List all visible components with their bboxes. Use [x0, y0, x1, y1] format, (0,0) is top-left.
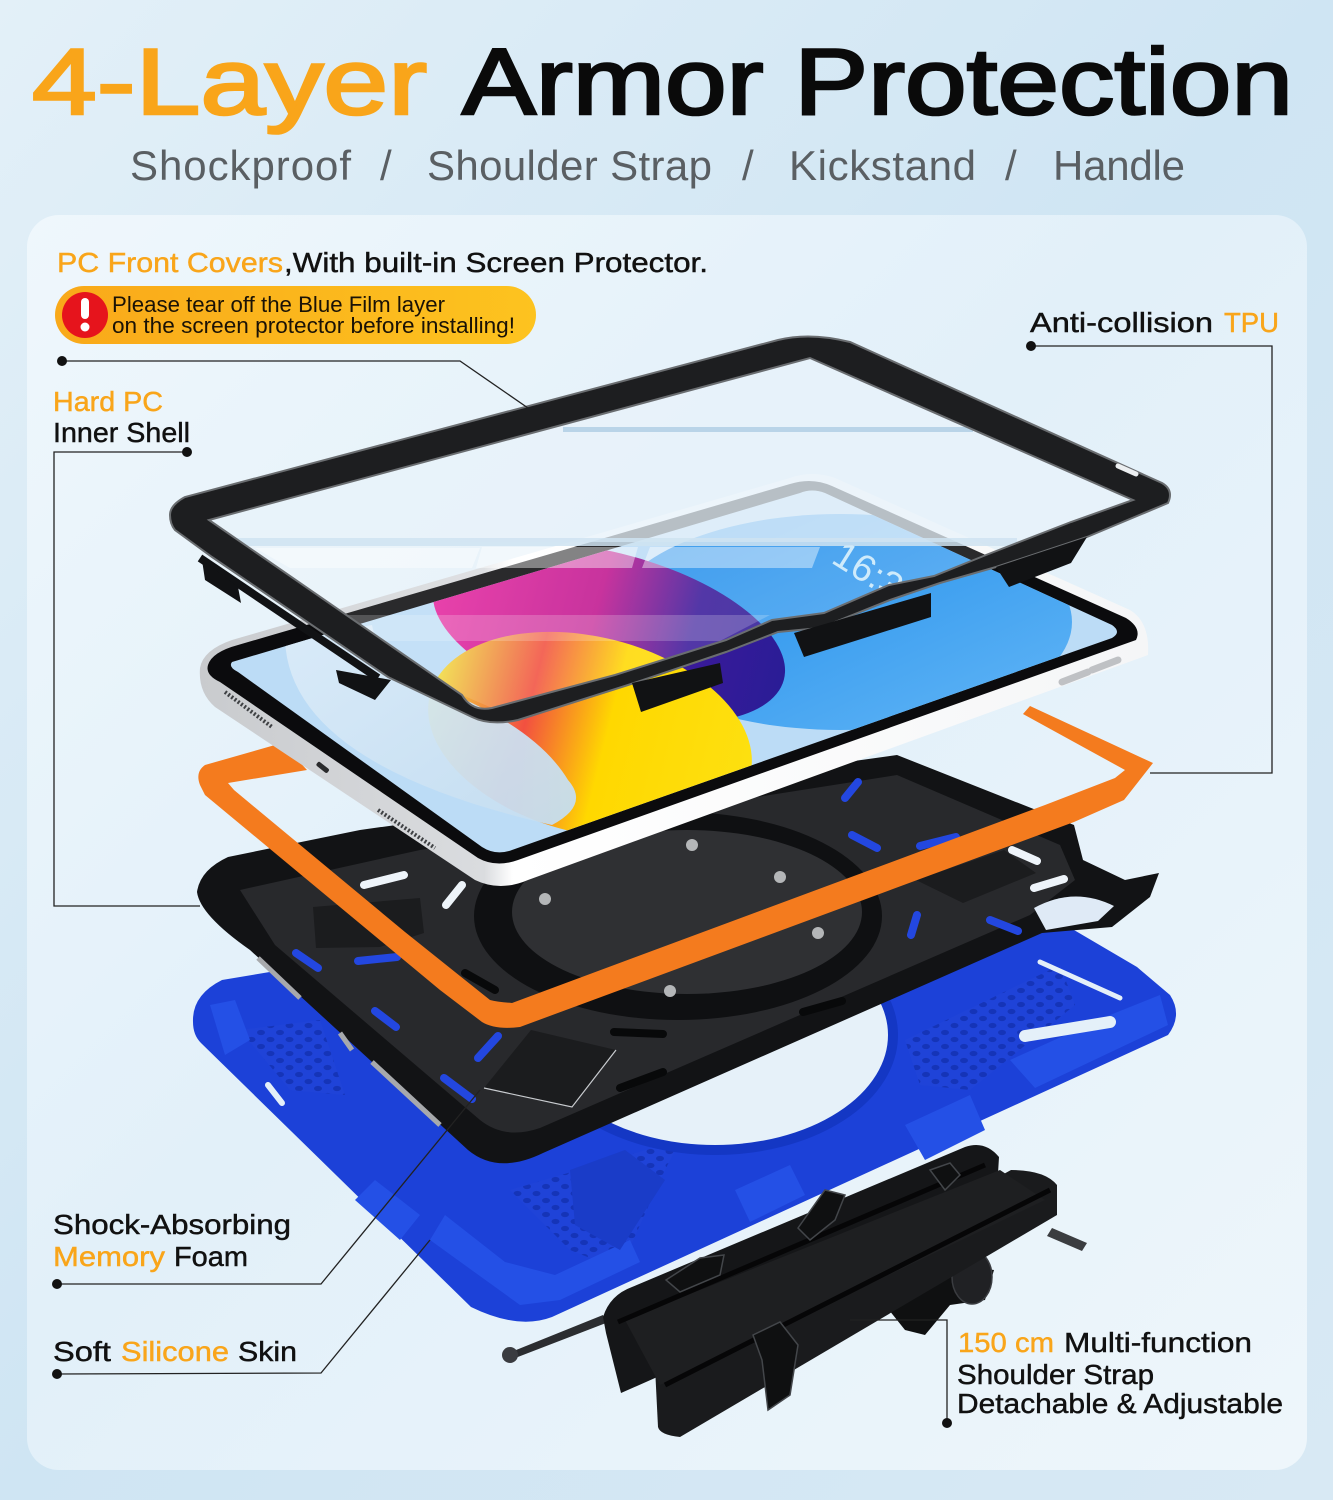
callout: shoulder strap	[850, 1320, 1283, 1428]
subtitle: Handle	[1053, 142, 1185, 189]
callout: silicone skin: Skin	[238, 1336, 297, 1367]
title: Armor Protection	[462, 29, 1293, 134]
callout: shoulder strap: 150 cm	[958, 1327, 1054, 1358]
callout: anti-collision tpu: Anti-collision	[1030, 307, 1213, 338]
honeycomb texture	[240, 965, 1075, 1270]
layer: hard pc inner shell	[197, 755, 1159, 1163]
subtitle: Shockproof	[130, 142, 351, 189]
callout: pc front covers: ,With built-in Screen Protector.	[284, 247, 708, 278]
subtitle: /	[742, 142, 754, 189]
clock reflection on the tablet: 16:3	[825, 534, 910, 609]
camera cut-out	[1034, 896, 1114, 930]
screws	[539, 839, 824, 997]
subtitle: /	[380, 142, 392, 189]
window slots	[296, 782, 1064, 1099]
tablet buttons	[1062, 660, 1118, 682]
callout: anti-collision tpu	[1026, 307, 1279, 773]
skin cut-outs	[268, 962, 1120, 1103]
callout: memory foam	[52, 1090, 480, 1289]
callout: memory foam: Shock-Absorbing	[53, 1209, 291, 1240]
callout: hard pc inner shell: Hard PC	[53, 386, 163, 417]
callout: silicone skin	[52, 1240, 430, 1379]
cover frame	[170, 336, 1170, 722]
raised rim panels	[210, 995, 1168, 1305]
subtitle: Kickstand	[789, 142, 976, 189]
callout: shoulder strap: Shoulder Strap	[957, 1359, 1154, 1390]
subtitle	[130, 142, 1185, 189]
protector glass	[209, 358, 1133, 708]
callout: anti-collision tpu: TPU	[1224, 307, 1279, 338]
callout: memory foam: Memory	[53, 1241, 165, 1272]
callout: hard pc inner shell	[53, 386, 200, 906]
warning pill: Please tear off the Blue Film layer	[112, 292, 445, 317]
callout: pc front covers: PC Front Covers	[57, 247, 283, 278]
foam pads	[313, 850, 1036, 1107]
strap buckles	[666, 1163, 960, 1410]
strap front loop	[655, 1170, 1057, 1437]
cover port slot	[1118, 466, 1136, 474]
strap back loop	[603, 1145, 999, 1393]
rotating ring	[474, 812, 882, 1020]
callout: shoulder strap: Multi-function	[1064, 1327, 1252, 1358]
callout: memory foam: Foam	[174, 1241, 248, 1272]
icon: warning	[62, 292, 108, 338]
tablet speakers and port	[225, 692, 435, 848]
title	[32, 29, 1293, 134]
title: 4-Layer	[32, 29, 427, 134]
silicone ring opening	[537, 920, 893, 1150]
callout: silicone skin: Silicone	[121, 1336, 229, 1367]
layer: blue silicone skin	[193, 900, 1176, 1322]
callout: pc front covers	[57, 247, 708, 408]
layer: pc front cover with screen protector	[170, 336, 1170, 722]
warning pill	[55, 286, 536, 344]
layer: tablet	[200, 470, 1150, 886]
layer: shoulder strap	[502, 1145, 1087, 1437]
callout: silicone skin: Soft	[53, 1336, 111, 1367]
subtitle: /	[1005, 142, 1017, 189]
callout: shoulder strap: Detachable & Adjustable	[957, 1388, 1283, 1419]
side hardware	[258, 958, 440, 1125]
tablet screen wallpaper	[230, 490, 1117, 852]
subtitle: Shoulder Strap	[427, 142, 712, 189]
cover clips	[200, 558, 378, 678]
strap side buckle	[885, 1265, 994, 1335]
warning pill: on the screen protector before installing!	[112, 313, 515, 338]
callout: hard pc inner shell: Inner Shell	[53, 417, 190, 448]
layer: orange tpu frame	[198, 706, 1153, 1028]
